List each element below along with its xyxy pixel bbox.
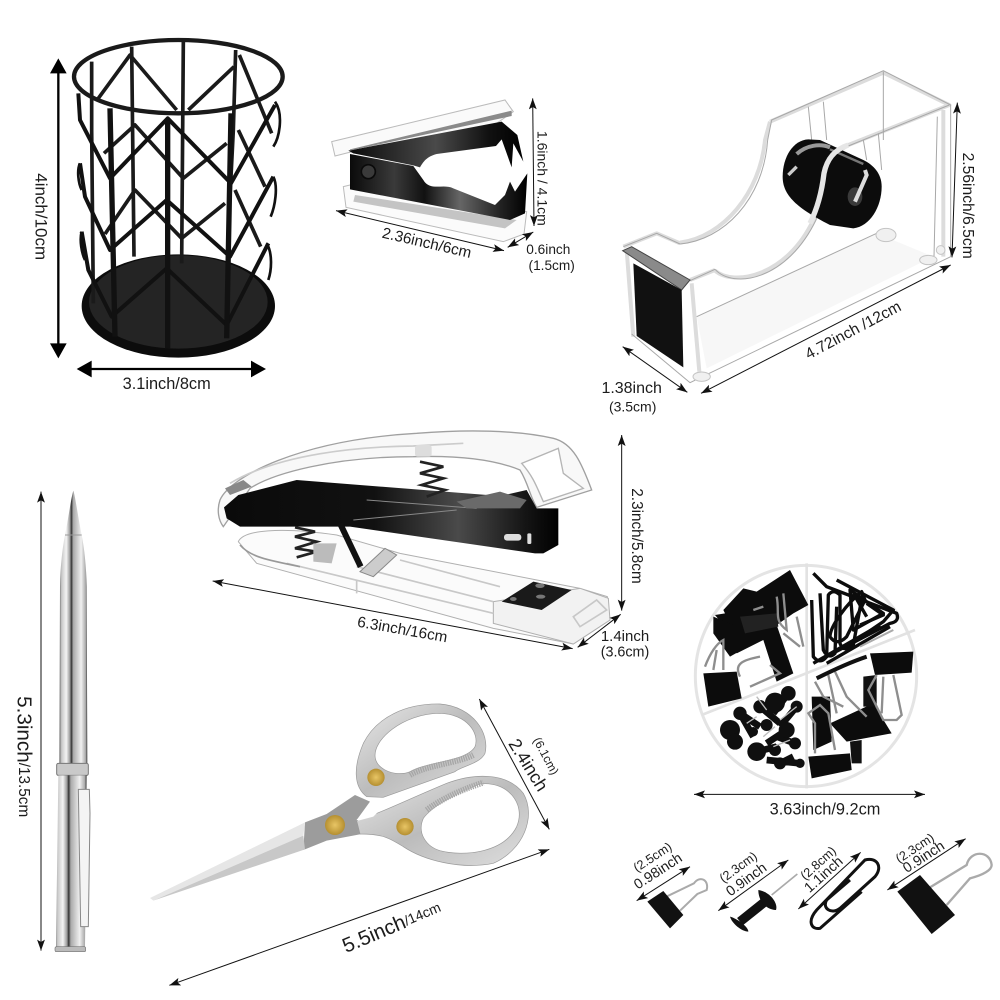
paperclips: top-right: [812, 573, 897, 663]
clear arm across roll: [810, 145, 848, 223]
left end cap: [225, 480, 252, 495]
blade facet: [150, 822, 305, 901]
pen ring: [57, 763, 88, 775]
pushpins: bottom-left: [720, 686, 805, 769]
clips: top-left: [703, 570, 808, 707]
slots: [504, 533, 531, 544]
base lower block: [313, 543, 337, 563]
arrows: [623, 103, 957, 393]
cutter blade: [623, 247, 690, 290]
dividers: [702, 563, 915, 788]
clear arm at axle: [855, 170, 867, 202]
panel: organizer: [694, 563, 925, 818]
spring cap: [415, 445, 432, 457]
base rails: [240, 545, 607, 627]
finger slot: [357, 777, 453, 821]
tape roll: [783, 139, 882, 228]
black arm: [224, 480, 558, 553]
push pin: 0.9inch: [723, 860, 770, 900]
label: thickness: 0.6inch: [526, 242, 570, 257]
black anvil plate: [502, 582, 572, 610]
upper jaw: [348, 122, 523, 167]
arrows: [169, 699, 549, 985]
label: width: 2.4inch: [504, 735, 552, 795]
tray: [695, 565, 917, 787]
label: length: 5.5inch/14cm: [339, 896, 444, 958]
front uprights: [110, 108, 231, 348]
pivot: [361, 165, 375, 179]
height arrow: [50, 58, 67, 358]
clear base: [238, 530, 610, 644]
lower rivet: [396, 818, 414, 835]
panel: pen: [12, 491, 90, 952]
lower barrel: [55, 775, 87, 952]
pen body: [59, 491, 87, 763]
paper clip: (2.8cm): [798, 844, 839, 883]
label: width: 1.4inch: [601, 628, 649, 645]
arm highlight: [353, 500, 477, 520]
acrylic thin lines: [623, 71, 951, 383]
label: 5.3inch /13.5cm: [12, 696, 35, 817]
label: height: 1.6inch / 4.1cm: [535, 131, 551, 226]
black end plate: [633, 263, 683, 367]
pivot rivet: [325, 815, 345, 835]
panel: stapler: [213, 431, 649, 661]
label: width: [601, 628, 649, 661]
label: length: 6.3inch/16cm: [356, 614, 449, 646]
blade base: [303, 795, 370, 850]
label: thickness: [526, 242, 575, 273]
arrows: [213, 435, 622, 649]
upper handle: [356, 704, 486, 797]
large binder clip: [887, 831, 992, 934]
push pin: (2.3cm): [717, 849, 760, 886]
label: length: 4.72inch /12cm: [802, 298, 904, 363]
large binder clip: (2.3cm): [893, 831, 937, 866]
top inner edge: [230, 443, 463, 483]
label: depth: [601, 380, 662, 415]
arrows: [336, 98, 534, 251]
arrow: [39, 492, 42, 951]
upper rivet: [367, 769, 385, 786]
feed mechanism: [457, 492, 527, 508]
panel: pen holder: [31, 40, 283, 393]
post: [340, 523, 361, 567]
lower jaw: [350, 154, 527, 220]
label: height: 2.3inch/5.8cm: [628, 488, 645, 584]
bumpers: [693, 228, 945, 381]
top rim: [74, 40, 283, 113]
back wires: [92, 42, 272, 303]
lower handle: [357, 776, 528, 865]
label: height: 4inch/10cm: [31, 173, 50, 260]
clear top: [332, 100, 513, 156]
label: length: 2.36inch/6cm: [380, 225, 473, 262]
pen collar: [65, 533, 82, 536]
base shading: [697, 233, 933, 368]
front wires: [78, 93, 275, 325]
small binder clip: (2.5cm): [631, 840, 674, 875]
label: height: 2.56inch/6.5cm: [959, 153, 976, 259]
end cap: [55, 947, 86, 952]
base plate: [82, 254, 275, 358]
panel: scissors: [150, 699, 562, 985]
lower spring: [295, 527, 317, 557]
panel: tape dispenser: [601, 71, 976, 415]
push pin: [717, 849, 797, 932]
handle texture: [410, 755, 483, 810]
acrylic thick bands: [623, 73, 949, 372]
base shading: [353, 195, 517, 228]
label: width: (6.1cm): [530, 735, 562, 777]
label: depth: (3.5cm): [609, 399, 656, 415]
label: width: (3.6cm): [601, 645, 649, 661]
clear base: [343, 185, 527, 242]
label: depth: 1.38inch: [601, 380, 662, 397]
small binder clip: [631, 840, 707, 928]
arrow: [694, 793, 925, 796]
paper clip: [798, 844, 879, 929]
label: width: 3.1inch/8cm: [123, 375, 211, 393]
clear top: [218, 431, 592, 527]
hinge: [360, 548, 397, 577]
blade lower facet: [153, 836, 305, 901]
side loops: [78, 102, 280, 280]
width arrow: [77, 361, 266, 377]
upper spring: [420, 462, 445, 497]
clips: bottom-right: [808, 652, 913, 778]
top jaw highlight: [350, 111, 512, 151]
label: 3.63inch/9.2cm: [770, 800, 880, 818]
paper clip: 1.1inch: [801, 854, 847, 896]
panel: individual parts: [631, 831, 992, 934]
top cap detail: [522, 448, 583, 502]
label: thickness: (1.5cm): [529, 258, 575, 273]
panel: staple remover: [332, 98, 575, 273]
small binder clip: 0.98inch: [631, 850, 685, 893]
pen clip: [78, 789, 90, 927]
large binder clip: 0.9inch: [900, 838, 948, 877]
